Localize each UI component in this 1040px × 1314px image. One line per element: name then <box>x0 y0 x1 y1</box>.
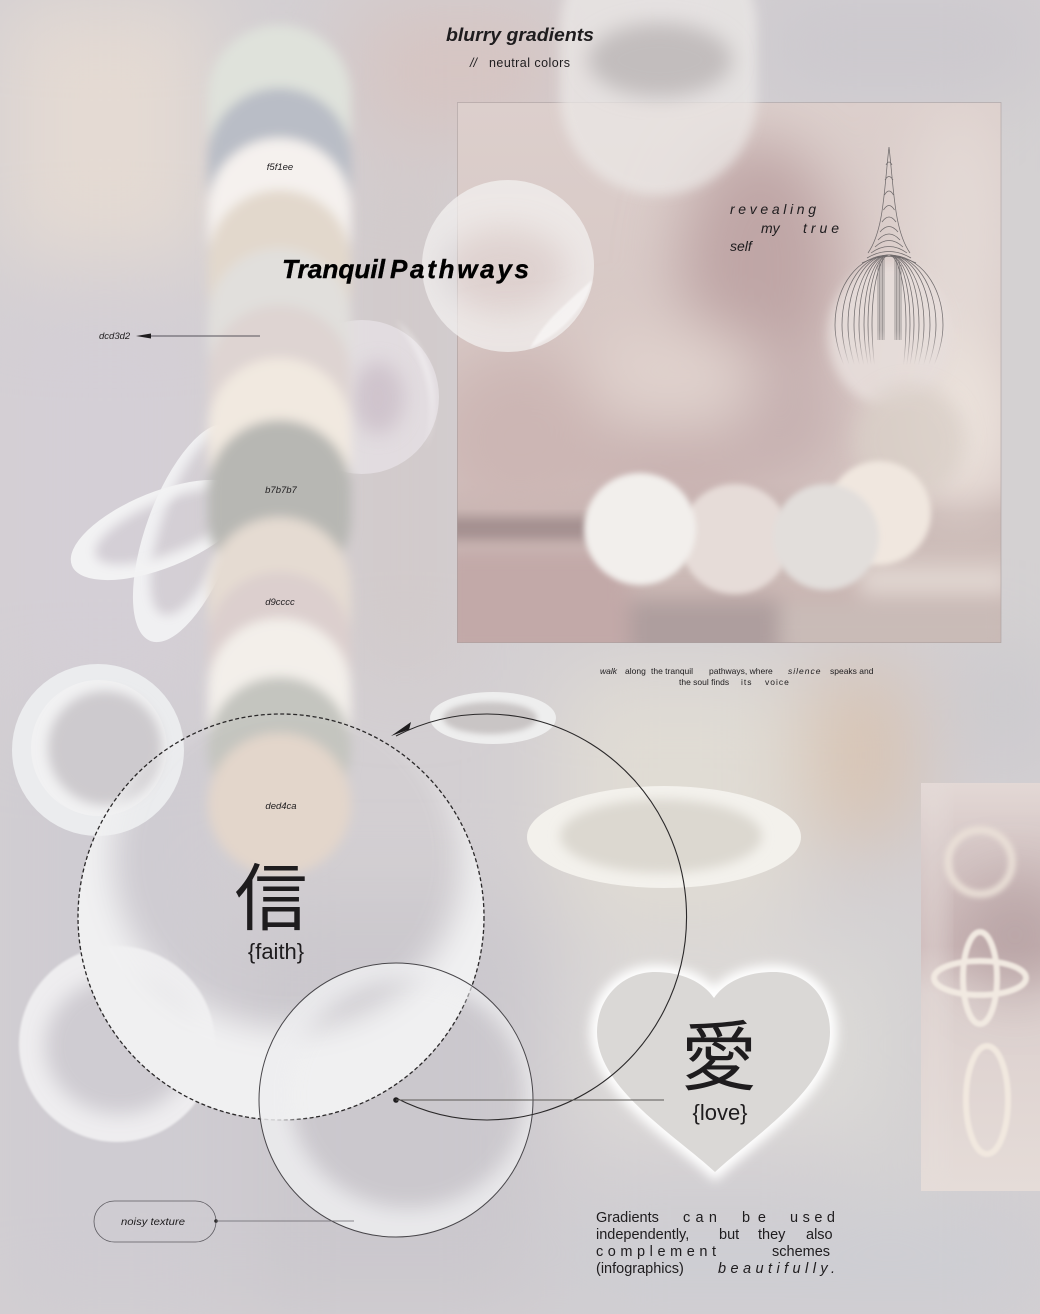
love label: {love} <box>692 1100 748 1125</box>
body text: beautifully. <box>718 1261 835 1277</box>
noisy texture pill <box>94 1201 354 1242</box>
side panel <box>921 783 1040 1191</box>
horizon band <box>457 512 1001 643</box>
pointer line to love <box>393 1097 664 1103</box>
heart <box>597 972 830 1172</box>
title <box>282 254 529 284</box>
swatch label: d9cccc <box>265 597 295 608</box>
caption <box>600 666 874 687</box>
title: Pathways <box>390 254 529 284</box>
caption: walk <box>600 666 618 676</box>
caption: the soul finds <box>679 677 729 687</box>
caption: along <box>625 666 646 676</box>
body text: Gradients <box>596 1210 659 1226</box>
outline circle <box>258 962 534 1238</box>
pale glow below drop <box>828 263 952 407</box>
bokeh circles <box>584 385 966 594</box>
body text: (infographics) <box>596 1261 684 1277</box>
side orbit icon <box>934 932 1026 1024</box>
love label: 愛 <box>681 996 757 1106</box>
curved arrow <box>391 714 687 1120</box>
heading: blurry gradients <box>446 25 594 45</box>
subheading: // <box>469 56 478 70</box>
caption: voice <box>765 677 790 687</box>
body text: schemes <box>772 1244 830 1260</box>
title: Tranquil <box>282 254 386 284</box>
small top ellipse ring <box>430 692 556 744</box>
body text: used <box>790 1210 835 1226</box>
body text: also <box>806 1227 833 1243</box>
dcd3d2 arrow <box>136 334 260 338</box>
swatch label: dcd3d2 <box>99 331 131 342</box>
body text <box>596 1210 835 1277</box>
poem: true <box>803 220 839 236</box>
body text: independently, <box>596 1227 689 1243</box>
faith label: {faith} <box>248 939 304 964</box>
top glowing ring <box>560 0 757 195</box>
caption: the tranquil <box>651 666 693 676</box>
body text: they <box>758 1227 786 1243</box>
large beige ellipse ring <box>527 786 801 888</box>
subheading: neutral colors <box>489 56 570 70</box>
panel border <box>458 102 1001 642</box>
faith circle <box>77 713 485 1121</box>
poem <box>730 201 839 254</box>
side ring icon <box>948 830 1012 894</box>
poem: revealing <box>730 201 816 217</box>
body text: can <box>683 1210 717 1226</box>
body text: be <box>742 1210 766 1226</box>
poem: my <box>761 220 781 236</box>
drop line art <box>835 147 943 370</box>
colour swatch stack <box>208 25 351 875</box>
bottom left ring <box>18 948 211 1142</box>
orbit rings icon <box>70 428 216 642</box>
body text: complement <box>596 1244 716 1260</box>
noisy texture pill: noisy texture <box>121 1216 185 1228</box>
bubble: title sphere <box>422 180 594 352</box>
poem: self <box>730 238 754 254</box>
caption: pathways, where <box>709 666 773 676</box>
image panel: blurred landscape <box>457 103 1001 643</box>
swatch label: ded4ca <box>265 801 297 812</box>
caption: speaks and <box>830 666 874 676</box>
swatch label: f5f1ee <box>267 162 293 173</box>
side ellipse icon <box>966 1046 1008 1154</box>
double ring icon <box>12 664 184 836</box>
body text: but <box>719 1227 739 1243</box>
faith label: 信 <box>234 840 308 946</box>
swatch label: b7b7b7 <box>265 485 298 496</box>
caption: silence <box>788 666 821 676</box>
caption: its <box>741 677 752 687</box>
bubble: lower sphere <box>285 320 439 474</box>
